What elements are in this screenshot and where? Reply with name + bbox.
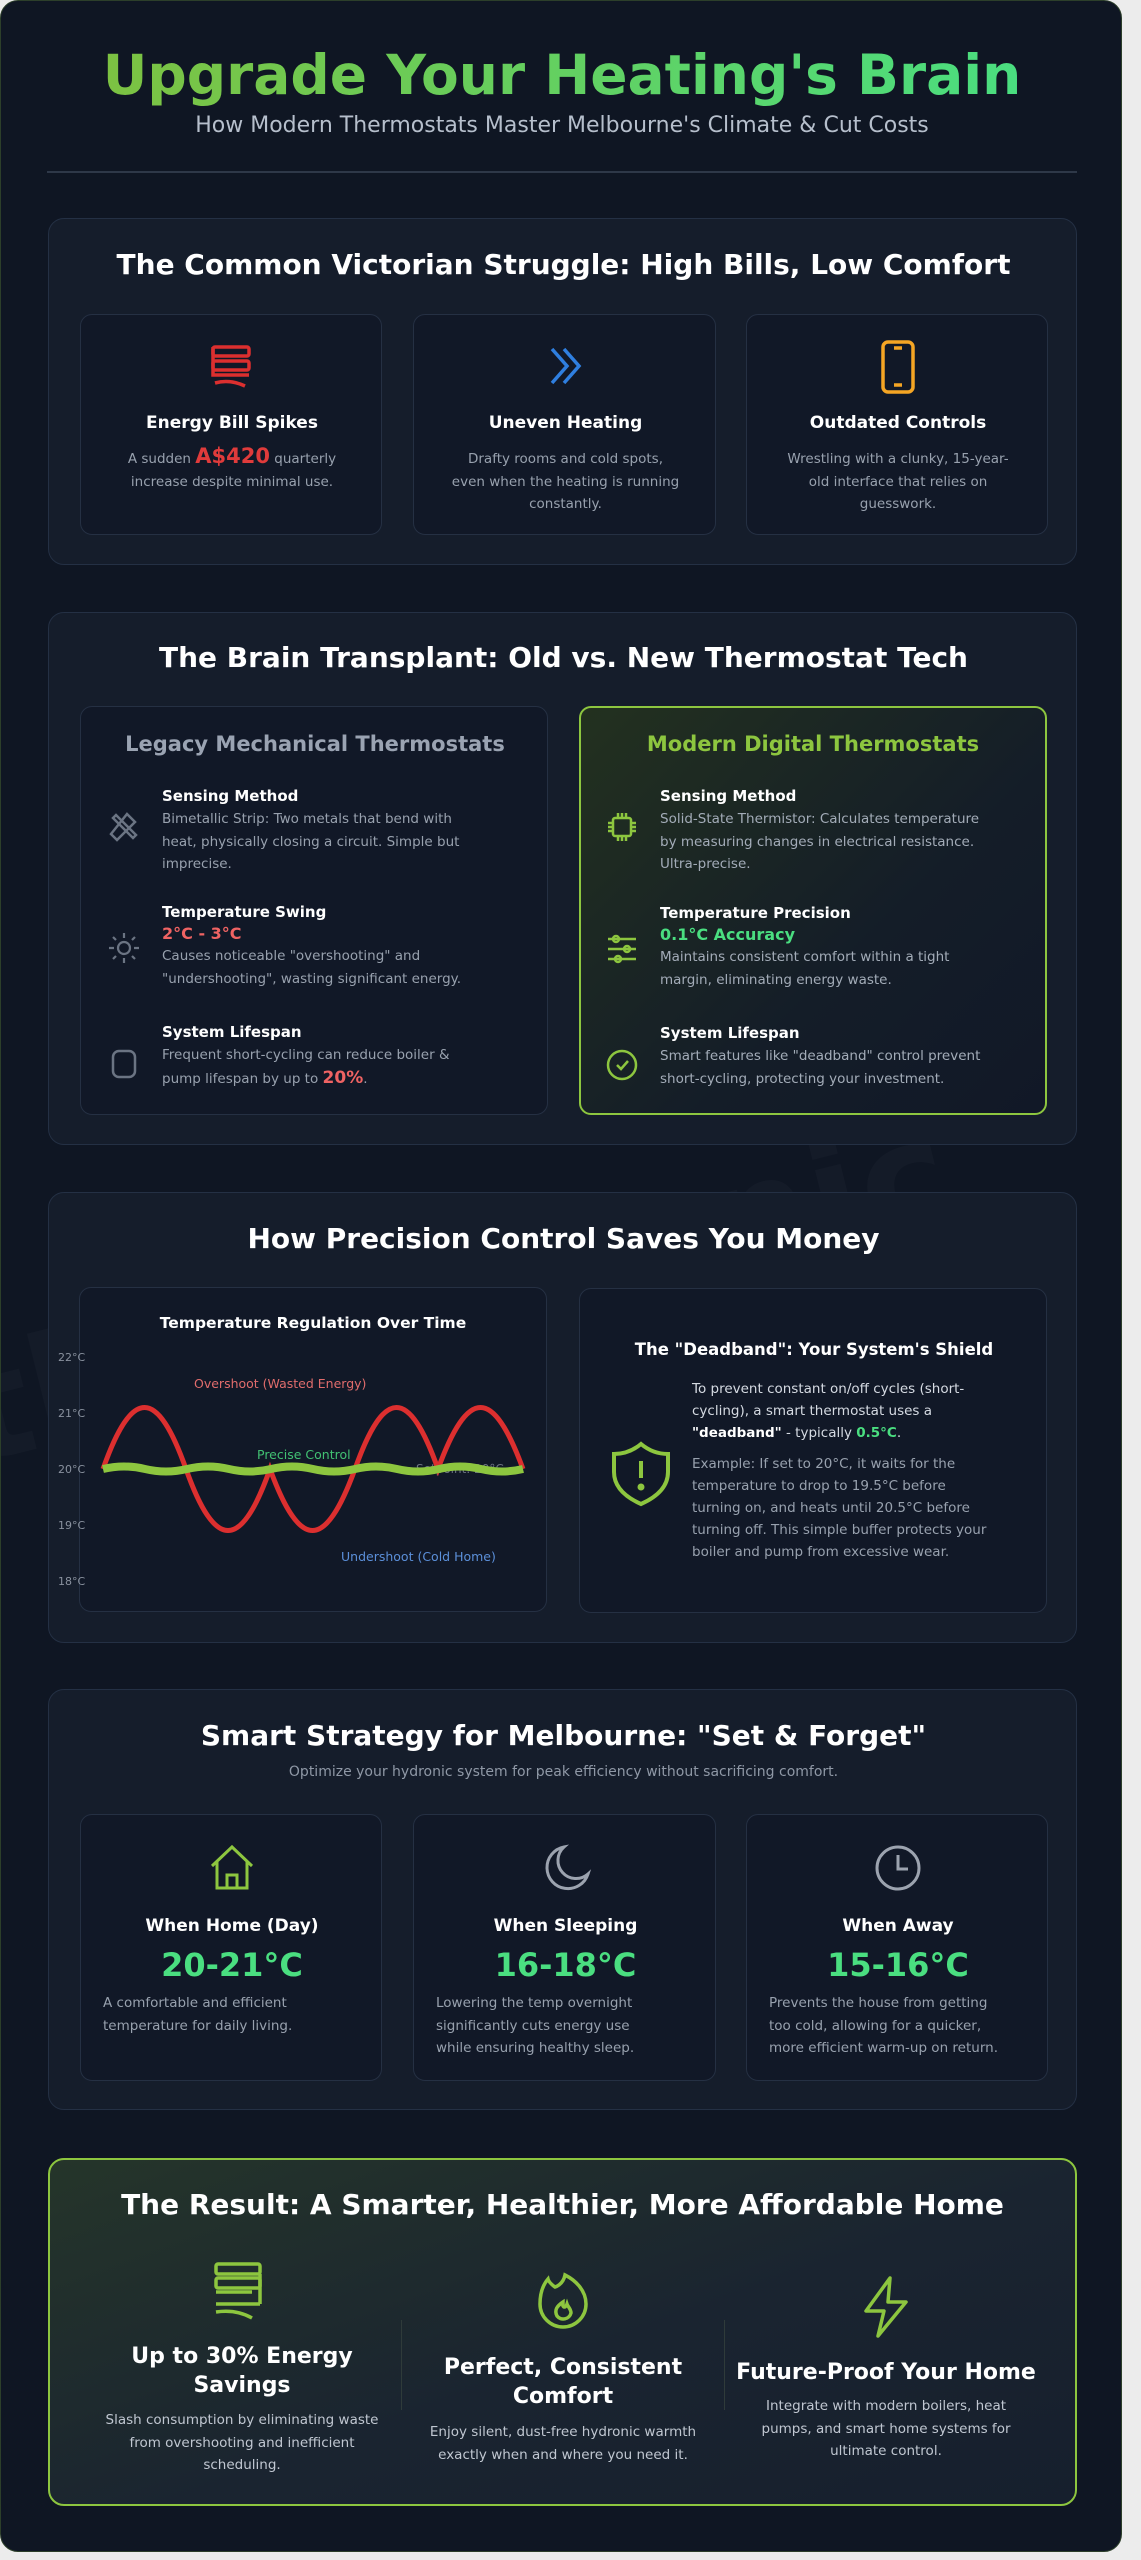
card: home: When Home (Day)	[145, 1916, 319, 1936]
item: sensing: Solid-State Thermistor: Calculates temperature	[660, 811, 979, 827]
right box: deadband	[579, 1288, 1047, 1613]
heading: Smart Strategy for Melbourne: "Set & Forget"	[201, 1719, 926, 1752]
item: comfort: Comfort	[513, 2384, 613, 2409]
icon: phone	[881, 340, 915, 394]
desc: even when the heating is running	[452, 474, 679, 490]
icon: bill	[211, 345, 251, 388]
card: sleeping: significantly cuts energy use	[436, 2018, 630, 2034]
desc: guesswork.	[860, 496, 936, 512]
legacy column	[80, 706, 548, 1115]
item: future-proof: pumps, and smart home systems for	[762, 2420, 1010, 2436]
subheading: Modern Digital Thermostats	[647, 732, 979, 756]
subheading: Optimize your hydronic system for peak efficiency without sacrificing comfort.	[289, 1764, 838, 1780]
item: lifespan: System Lifespan	[660, 1024, 800, 1042]
right box: deadband: turning off. This simple buffer protects your	[692, 1522, 986, 1538]
main card: Overshoot (Wasted Energy)	[194, 1376, 366, 1391]
card: sleeping: 16-18°C	[495, 1946, 636, 1984]
item: swing: "undershooting", wasting significant energy.	[162, 970, 461, 986]
item: savings	[106, 2262, 378, 2473]
item: lifespan: short-cycling, protecting your investment.	[660, 1070, 944, 1086]
text: "deadband" - typically 0.5°C.	[692, 1425, 901, 1441]
card: away: 15-16°C	[827, 1946, 969, 1984]
icon: shield	[612, 1442, 670, 1506]
icon: moon	[546, 1844, 591, 1890]
card: home: A comfortable and efficient	[103, 1995, 287, 2011]
card: uneven heating	[413, 314, 716, 535]
desc: increase despite minimal use.	[131, 474, 333, 490]
card: sleeping	[413, 1814, 716, 2081]
card: home: temperature for daily living.	[103, 2018, 292, 2034]
panel: common struggle	[48, 218, 1077, 565]
item: sensing: by measuring changes in electrical resistance.	[660, 834, 974, 850]
item: swing: 2°C - 3°C	[162, 924, 242, 943]
title: Upgrade Your Heating's Brain	[103, 43, 1021, 107]
card: outdated controls	[746, 314, 1048, 535]
main card: 19°C	[58, 1519, 85, 1532]
text: To prevent constant on/off cycles (short-	[692, 1381, 964, 1397]
subtitle: How Modern Thermostats Master Melbourne's Climate & Cut Costs	[195, 113, 929, 138]
panel: old vs new	[48, 612, 1077, 1145]
modern column	[579, 706, 1047, 1115]
icon: chip	[608, 813, 636, 841]
desc	[787, 451, 1009, 512]
icon: strip	[109, 812, 138, 842]
panel: precision control	[48, 1192, 1077, 1643]
card: away	[746, 1814, 1048, 2081]
title: Energy Bill Spikes	[146, 413, 318, 433]
item: savings: Up to 30% Energy	[131, 2344, 353, 2369]
right box: deadband: boiler and pump from excessive wear.	[692, 1544, 949, 1560]
card: home	[80, 1814, 382, 2081]
item: future-proof: Integrate with modern boilers, heat	[766, 2398, 1006, 2414]
right box: deadband: turning on, and heats until 20.5°C before	[692, 1500, 970, 1516]
item: comfort: Enjoy silent, dust-free hydronic warmth	[430, 2424, 696, 2440]
icon: chevrons	[550, 348, 582, 384]
item: swing: Temperature Swing	[162, 903, 326, 921]
icon: check circle	[606, 1050, 638, 1080]
card: away: more efficient warm-up on return.	[769, 2040, 998, 2056]
item: swing: Causes noticeable "overshooting" and	[162, 948, 420, 964]
item: lifespan: Smart features like "deadband" control prevent	[660, 1048, 980, 1064]
icon: clock	[876, 1846, 920, 1890]
card: sleeping: while ensuring healthy sleep.	[436, 2040, 634, 2056]
main card: 20°C	[58, 1463, 85, 1476]
item: comfort: Perfect, Consistent	[444, 2355, 682, 2380]
subheading: Legacy Mechanical Thermostats	[125, 732, 505, 756]
text: cycling), a smart thermostat uses a	[692, 1403, 932, 1419]
item: swing	[109, 903, 461, 986]
main card: Undershoot (Cold Home)	[341, 1549, 496, 1564]
item: sensing: heat, physically closing a circuit. Simple but	[162, 834, 459, 850]
item: sensing: Ultra-precise.	[660, 856, 751, 872]
desc: A sudden A$420 quarterly	[128, 444, 336, 468]
item: lifespan	[112, 1023, 449, 1088]
icon: sliders	[608, 934, 636, 964]
icon: rounded square	[112, 1050, 136, 1078]
panel: result	[48, 2158, 1077, 2506]
heading: The Common Victorian Struggle: High Bills, Low Comfort	[117, 248, 1010, 281]
item: comfort	[430, 2272, 696, 2462]
item: future-proof: ultimate control.	[830, 2443, 942, 2459]
item: sensing: imprecise.	[162, 856, 232, 872]
item: sensing: Sensing Method	[162, 787, 298, 805]
title: The "Deadband": Your System's Shield	[635, 1340, 993, 1359]
main card: 21°C	[58, 1407, 85, 1420]
icon: house	[211, 1845, 253, 1890]
desc: Wrestling with a clunky, 15-year-	[787, 451, 1009, 467]
title: Uneven Heating	[489, 413, 642, 433]
item: precision: 0.1°C Accuracy	[660, 925, 795, 944]
item: comfort: exactly when and where you need it.	[438, 2446, 688, 2462]
main card: Temperature Regulation Over Time	[160, 1314, 466, 1332]
item: sensing	[109, 787, 460, 872]
right box: deadband: temperature to drop to 19.5°C before	[692, 1478, 946, 1494]
chart: temperature regulation	[79, 1287, 547, 1612]
card: away: When Away	[842, 1916, 954, 1936]
title: Outdated Controls	[810, 413, 986, 433]
icon: stack	[214, 2262, 262, 2320]
desc: Drafty rooms and cold spots,	[468, 451, 663, 467]
item: precision: margin, eliminating energy waste.	[660, 972, 892, 988]
desc: old interface that relies on	[809, 474, 987, 490]
desc: constantly.	[529, 496, 602, 512]
heading: The Brain Transplant: Old vs. New Thermostat Tech	[159, 641, 968, 674]
item: savings: Slash consumption by eliminating waste	[106, 2412, 378, 2428]
card: sleeping: When Sleeping	[494, 1916, 637, 1936]
heading: The Result: A Smarter, Healthier, More Affordable Home	[121, 2188, 1004, 2221]
item: savings: scheduling.	[203, 2457, 281, 2473]
item: lifespan	[606, 1024, 980, 1086]
item: savings: Savings	[193, 2373, 291, 2398]
item: lifespan: System Lifespan	[162, 1023, 302, 1041]
card: away: too cold, allowing for a quicker,	[769, 2018, 981, 2034]
panel: smart strategy	[48, 1689, 1077, 2110]
main card: 22°C	[58, 1351, 85, 1364]
item: sensing	[608, 787, 979, 872]
heading: How Precision Control Saves You Money	[247, 1222, 880, 1255]
icon: flame	[538, 2272, 588, 2329]
desc	[452, 451, 679, 512]
item: precision: Temperature Precision	[660, 904, 851, 922]
main card: 18°C	[58, 1575, 85, 1588]
main card: Precise Control	[257, 1447, 351, 1462]
card: sleeping: Lowering the temp overnight	[436, 1995, 632, 2011]
item: precision: Maintains consistent comfort within a tight	[660, 949, 949, 965]
icon: bolt	[864, 2276, 908, 2338]
right box: deadband: Example: If set to 20°C, it waits for the	[692, 1456, 955, 1472]
card: home: 20-21°C	[161, 1946, 303, 1984]
card: away: Prevents the house from getting	[769, 1995, 987, 2011]
main card: Setpoint: 20°C	[416, 1462, 504, 1476]
text	[692, 1381, 964, 1441]
card: energy bill	[80, 314, 382, 535]
item: lifespan: pump lifespan by up to 20%.	[162, 1068, 368, 1088]
item: precision	[608, 904, 950, 988]
item: sensing: Bimetallic Strip: Two metals that bend with	[162, 811, 452, 827]
item: future-proof: Future-Proof Your Home	[736, 2360, 1036, 2385]
desc	[128, 444, 336, 490]
item: future-proof	[736, 2276, 1036, 2459]
icon: sun	[109, 933, 139, 963]
item: lifespan: Frequent short-cycling can reduce boiler &	[162, 1047, 449, 1063]
item: sensing: Sensing Method	[660, 787, 796, 805]
item: savings: from overshooting and inefficient	[129, 2434, 355, 2450]
